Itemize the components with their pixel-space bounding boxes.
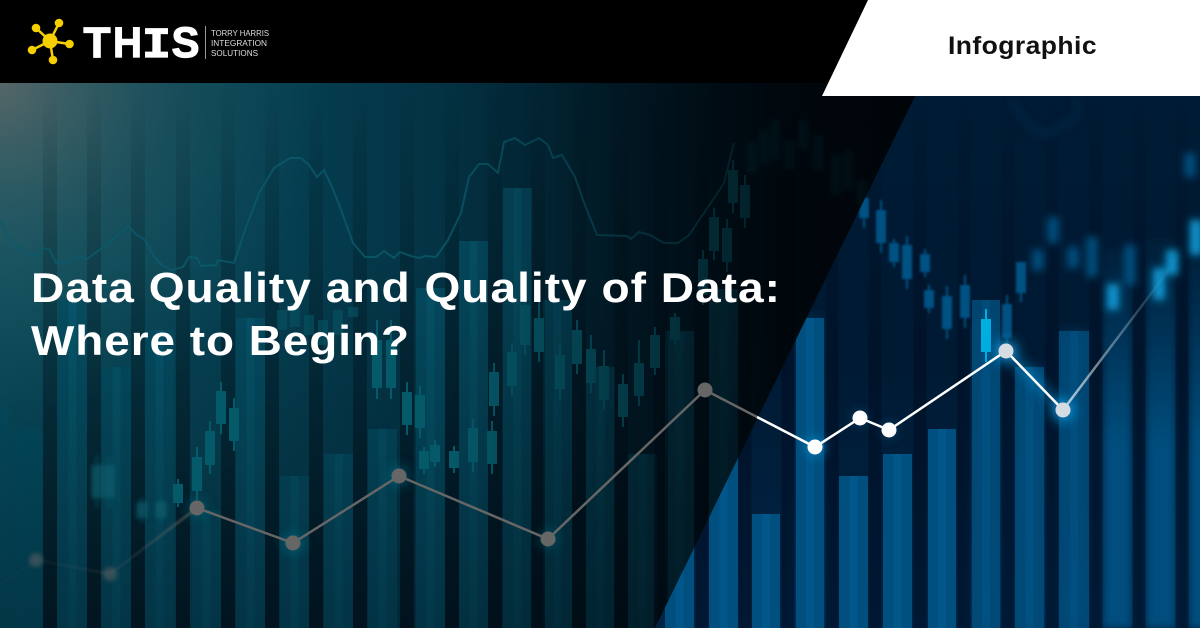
candlesticks right: [864, 97, 1196, 362]
logo wordmark: S: [172, 19, 200, 67]
icon: network node: [28, 19, 74, 64]
bar glow: [796, 318, 1089, 628]
title: Where to Begin?: [31, 317, 410, 364]
points: [29, 344, 1070, 581]
logo company name: SOLUTIONS: [211, 49, 258, 58]
title: [31, 264, 781, 364]
area bars right: [665, 240, 1200, 628]
glows: [189, 340, 1074, 552]
logo wordmark: I: [142, 21, 171, 70]
panel: dark teal chart background, left of the diagonal: [0, 83, 960, 628]
logo company name: TORRY HARRIS: [211, 29, 269, 38]
logo wordmark: T: [84, 19, 110, 67]
logo: [28, 19, 269, 70]
grey segment: [197, 390, 757, 543]
candlesticks left: [97, 120, 862, 523]
logo company name: [211, 29, 269, 58]
white segment: [757, 351, 1063, 447]
header bar: [0, 0, 868, 83]
area bars left: [0, 188, 738, 628]
logo company name: INTEGRATION: [211, 39, 267, 48]
line chart with data points: [0, 255, 1180, 585]
infographic tag: [822, 0, 1200, 96]
gaps between columns: [696, 262, 1188, 628]
wave line chart: [0, 138, 734, 270]
title: Data Quality and Quality of Data:: [31, 264, 781, 311]
logo wordmark: H: [113, 19, 142, 67]
panel: navy chart background, right of the diagonal: [650, 96, 1200, 628]
gaps between columns: [43, 155, 668, 628]
logo wordmark: [84, 19, 200, 70]
fading trail: [1063, 255, 1180, 410]
infographic tag: Infographic: [948, 32, 1097, 60]
faded start of line: [0, 508, 197, 585]
